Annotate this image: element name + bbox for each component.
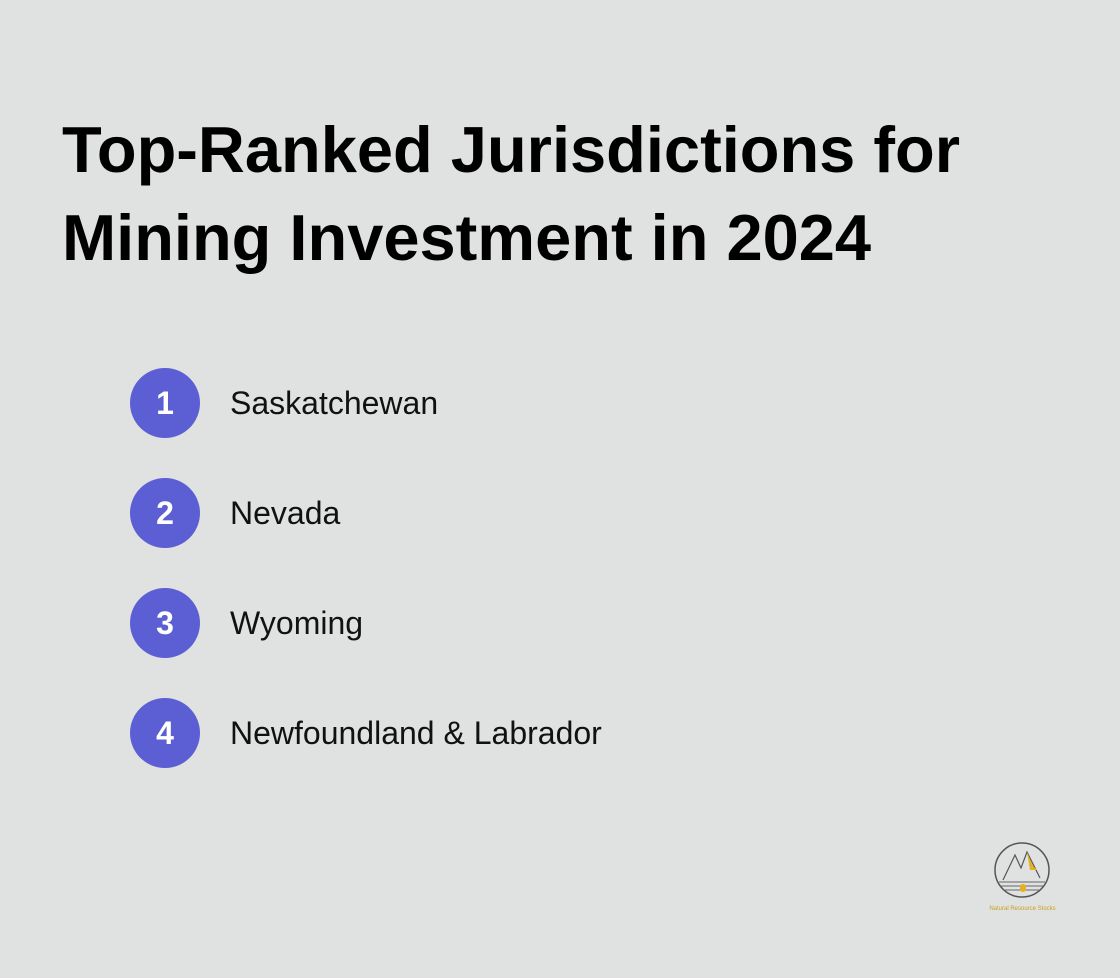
title: [62, 113, 960, 274]
list item 3: Wyoming: [230, 605, 363, 641]
list item 2: [130, 478, 340, 548]
list item 3: [130, 588, 363, 658]
logo: [989, 842, 1056, 912]
list item 3: 3: [156, 605, 174, 641]
list item 1: [130, 368, 438, 438]
list item 1: 1: [156, 385, 174, 421]
title: Top-Ranked Jurisdictions for: [62, 113, 960, 186]
list item 2: 2: [156, 495, 174, 531]
list item 4: Newfoundland & Labrador: [230, 715, 602, 751]
logo: Natural Resource Stocks: [989, 906, 1056, 912]
list item 4: 4: [156, 715, 174, 751]
title: Mining Investment in 2024: [62, 201, 871, 274]
list item 2: Nevada: [230, 495, 340, 531]
list item 1: Saskatchewan: [230, 385, 438, 421]
list item 4: [130, 698, 602, 768]
